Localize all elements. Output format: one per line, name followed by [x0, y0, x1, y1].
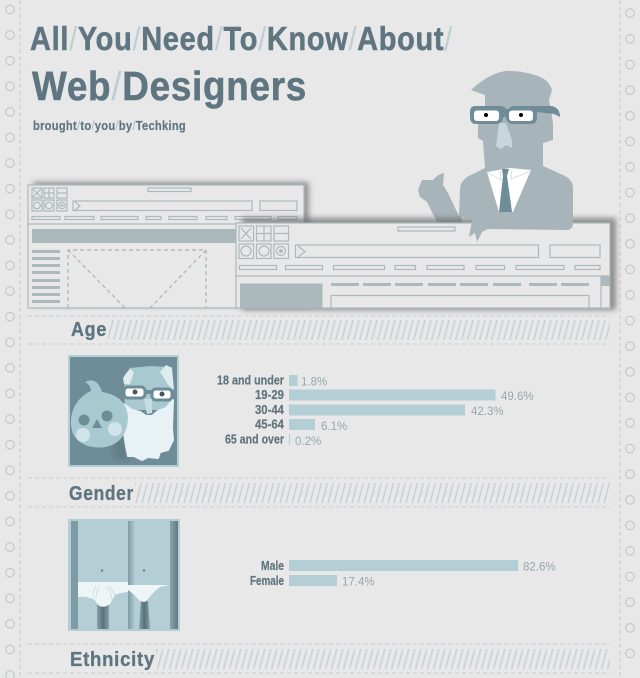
gender bar chart	[250, 559, 556, 588]
section header: Ethnicity	[28, 644, 610, 673]
right perforated margin	[620, 0, 634, 678]
byline: brought/to/you/by/Techking	[33, 118, 186, 133]
age illustration: baby and old man	[68, 355, 179, 467]
section header: Ethnicity: Ethnicity	[70, 649, 155, 671]
gender bar chart: Male	[261, 559, 284, 573]
left perforated margin	[6, 0, 20, 678]
designer arm with thumbs up	[418, 173, 462, 224]
designer head and body	[460, 71, 573, 242]
age bar chart: 30-44	[255, 403, 284, 417]
section header: Age	[28, 316, 610, 344]
age bar chart: 19-29	[255, 388, 284, 402]
old man	[112, 365, 174, 462]
section header: Age: Age	[71, 319, 107, 341]
gender illustration: two torsos in underwear	[68, 519, 180, 631]
nose	[496, 123, 512, 149]
glasses	[470, 106, 560, 124]
section header: Gender: Gender	[69, 483, 134, 505]
male figure	[78, 569, 128, 629]
section header: Gender	[28, 478, 610, 507]
title line one: All/You/Need/To/Know/About/	[30, 20, 453, 57]
browser window: front	[236, 223, 610, 308]
age bar chart: 6.1%	[321, 421, 347, 433]
browser window: back	[28, 182, 309, 308]
age bar chart: 49.6%	[501, 391, 534, 403]
gender bar chart: Female	[250, 574, 284, 588]
title line two: Web/Designers	[32, 63, 307, 109]
age bar chart: 45-64	[255, 418, 284, 432]
shirt and tie	[487, 168, 531, 212]
female figure	[128, 569, 170, 629]
designer character	[460, 71, 573, 242]
age bar chart	[217, 374, 534, 448]
gender bar chart: 82.6%	[523, 562, 556, 574]
age bar chart: 65 and over	[225, 432, 284, 446]
age bar chart: 0.2%	[295, 436, 321, 448]
baby	[71, 380, 128, 447]
age bar chart: 1.8%	[301, 376, 327, 388]
age bar chart: 18 and under	[217, 374, 284, 388]
age bar chart: 42.3%	[471, 406, 504, 418]
gender bar chart: 17.4%	[342, 576, 375, 588]
window shadow behind designer	[242, 218, 616, 310]
